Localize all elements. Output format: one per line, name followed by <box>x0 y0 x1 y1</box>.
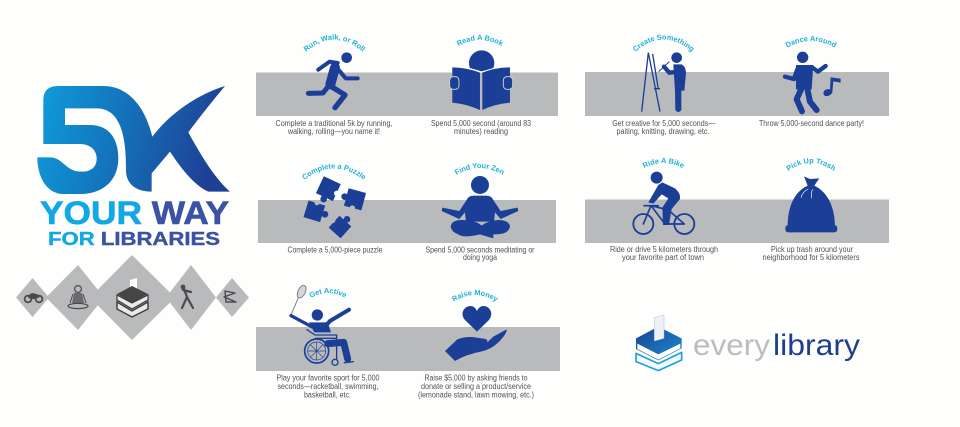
heading: Dance Around: Dance Around <box>785 36 837 48</box>
grey band <box>256 72 558 116</box>
grey band <box>585 72 889 116</box>
description: Get creative for 5,000 seconds— <box>612 119 715 128</box>
description: (lemonade stand, lawn mowing, etc.) <box>418 390 534 399</box>
description: basketball, etc. <box>304 390 351 399</box>
description: Spend 5,000 seconds meditating or <box>426 245 535 254</box>
description: seconds—racketball, swimming, <box>278 382 378 391</box>
description: Pick up trash around your <box>771 245 853 254</box>
diamond: running shoe <box>216 278 249 317</box>
grey band <box>256 327 560 371</box>
heading: Run, Walk, or Roll: Run, Walk, or Roll <box>303 34 366 52</box>
grey band <box>258 200 556 243</box>
description: walking, rolling—you name it! <box>287 127 380 136</box>
subheading: For Libraries: FOR LIBRARIES <box>48 228 220 249</box>
description: Ride or drive 5 kilometers through <box>610 245 718 254</box>
description: neighborhood for 5 kilometers <box>762 253 860 262</box>
description: Complete a 5,000-piece puzzle <box>288 245 383 254</box>
description: Spend 5,000 second (around 83 <box>431 119 531 128</box>
description: Play your favorite sport for 5,000 <box>276 374 380 383</box>
description: your favorite part of town <box>622 253 704 262</box>
heading: Your Way: YOUR WAY <box>40 195 229 231</box>
wordmark: every: every <box>693 329 770 362</box>
diamond icon strip <box>16 255 249 340</box>
logo: everylibrary <box>636 315 860 371</box>
grey band <box>585 200 889 243</box>
heading: Pick Up Trash: Pick Up Trash <box>786 158 835 171</box>
wordmark: library: library <box>773 329 860 362</box>
heading: Find Your Zen: Find Your Zen <box>454 163 504 175</box>
icon: reader with book <box>450 50 513 110</box>
icon: dancer and music note <box>785 52 841 111</box>
icon: trash bag <box>785 176 837 232</box>
diamond: dancer <box>166 265 216 330</box>
diamond: books and ballot logo <box>90 255 175 340</box>
panel: row one right <box>585 34 889 136</box>
description: paiting, knitting, drawing, etc. <box>616 127 710 136</box>
panel: row one left <box>256 34 558 136</box>
icon: cyclist <box>633 172 694 234</box>
heading: Get Active: Get Active <box>310 288 346 298</box>
description: doing yoga <box>463 253 497 262</box>
icon: puzzle pieces <box>304 176 366 238</box>
description: Raise $5,000 by asking friends to <box>424 374 528 383</box>
logo mark: 5K <box>37 86 230 194</box>
heading: Ride A Bike: Ride A Bike <box>642 158 684 168</box>
description: Throw 5,000-second dance party! <box>759 119 864 128</box>
panel: row two right <box>585 158 889 262</box>
icon: stacked books with ballot <box>636 315 682 371</box>
heading: Complete a Puzzle: Complete a Puzzle <box>302 164 366 180</box>
icon: painter at easel <box>642 52 686 112</box>
diamond: meditation <box>46 265 104 330</box>
heading: Raise Money: Raise Money <box>452 290 498 302</box>
description: minutes) reading <box>454 127 508 136</box>
logo: 5K Your Way for Libraries <box>37 86 230 249</box>
heading: Read A Book: Read A Book <box>456 34 504 46</box>
icon: runner <box>308 52 358 108</box>
icon: meditating person <box>442 176 518 238</box>
heading: Create Something: Create Something <box>633 34 694 52</box>
description: Complete a traditional 5k by running, <box>276 119 392 128</box>
panel: row two left <box>258 163 556 262</box>
icon: wheelchair athlete with racket <box>291 284 353 365</box>
diamond: motorcycle <box>16 278 49 317</box>
icon: hand holding heart <box>445 306 507 361</box>
description: donate or selling a product/service <box>421 382 531 391</box>
panel: row three left <box>256 284 560 399</box>
